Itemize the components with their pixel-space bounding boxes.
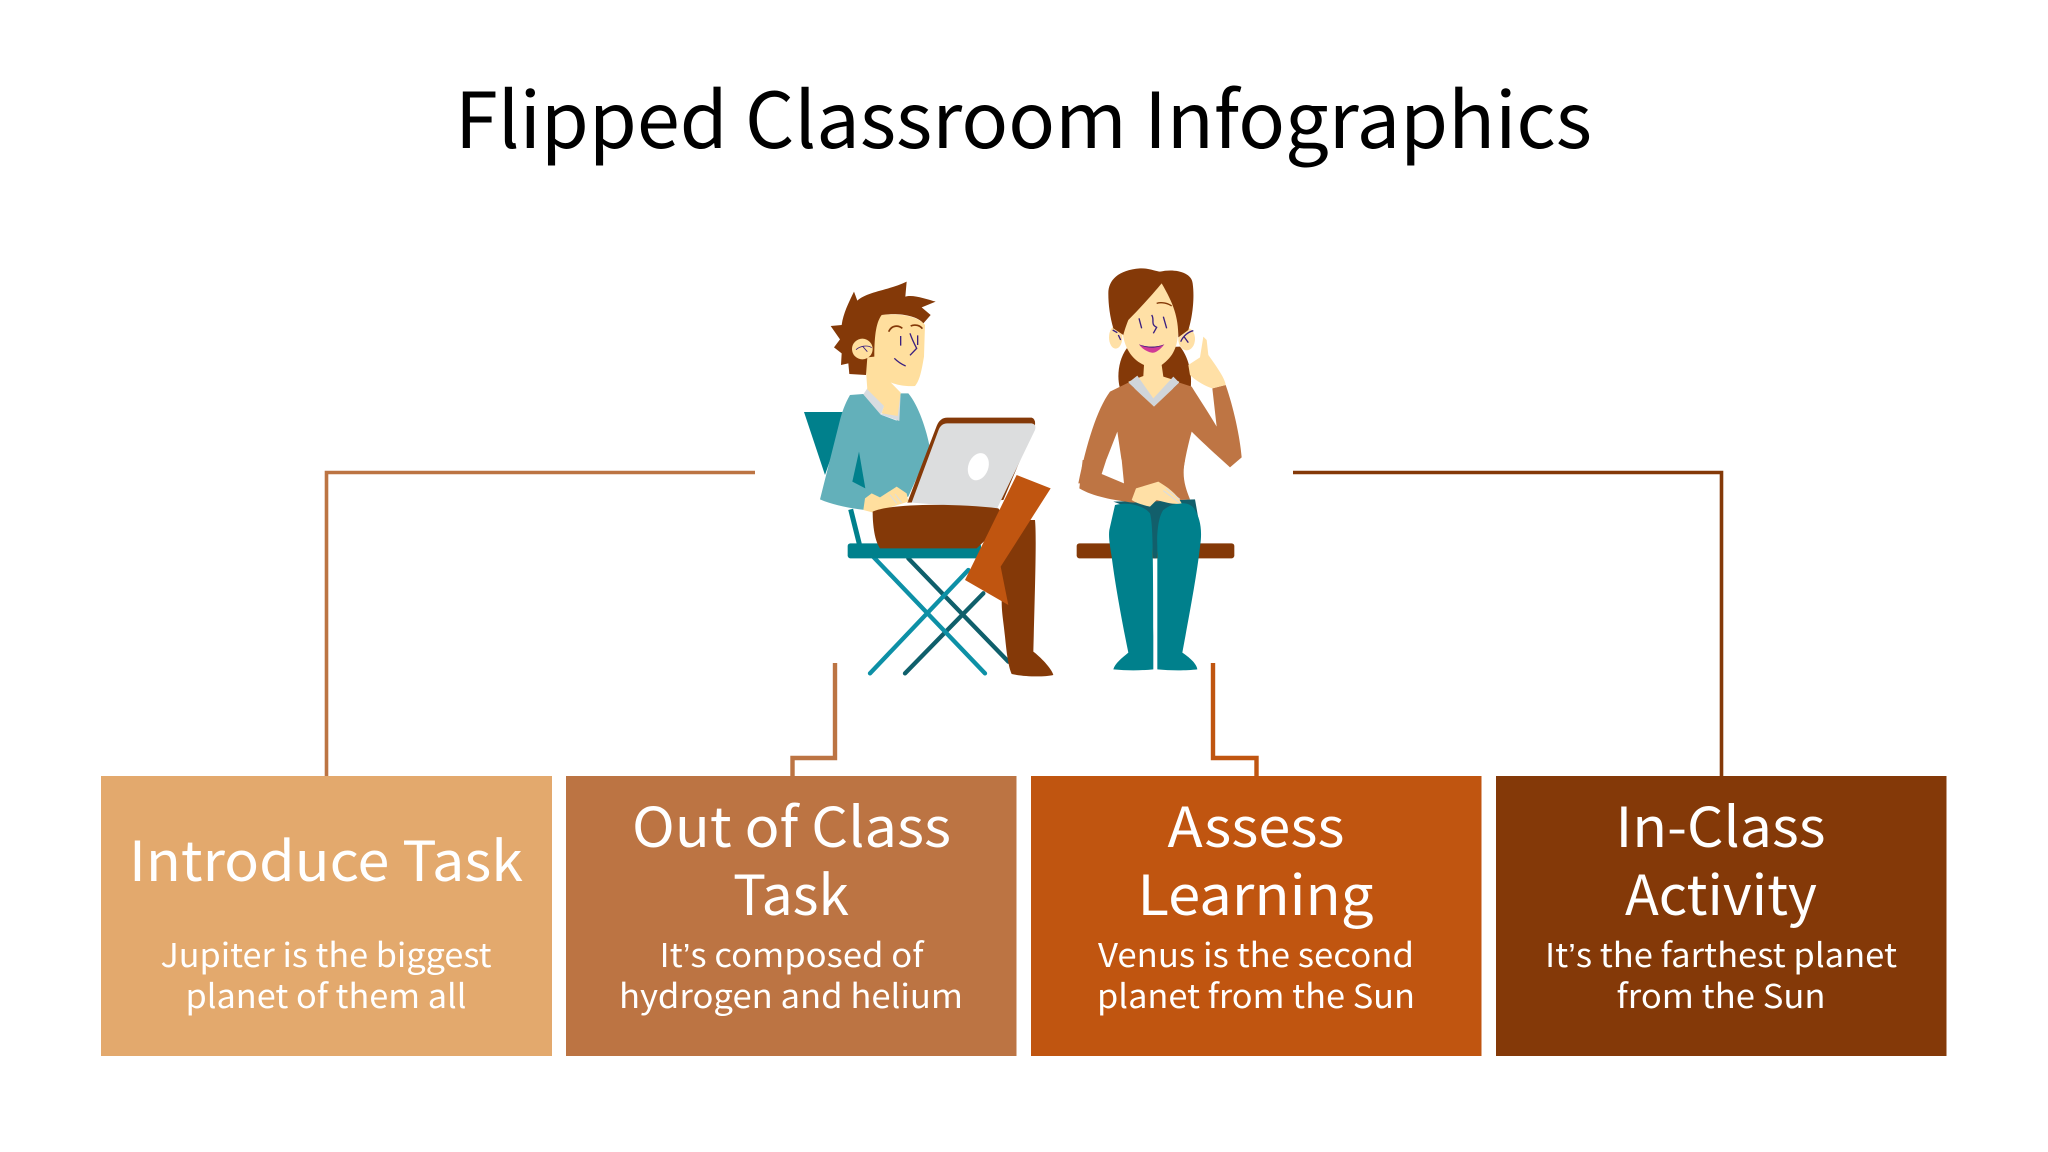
body: in-class activity: It’s the farthest planet — [1545, 929, 1897, 977]
body: assess learning: planet from the Sun — [1097, 970, 1415, 1018]
connector: assess learning — [1213, 663, 1256, 776]
title: Flipped Classroom Infographics — [455, 60, 1592, 171]
connector: introduce task — [326, 472, 755, 776]
heading: assess learning: Learning — [1138, 851, 1374, 931]
body: in-class activity — [1545, 929, 1897, 1018]
body: introduce task — [160, 929, 492, 1018]
woman sitting on bench — [1077, 268, 1242, 670]
heading: out of class task: Out of Class — [632, 783, 951, 863]
connector: in-class activity — [1293, 472, 1722, 776]
woman's hair and head — [1078, 268, 1242, 483]
heading: assess learning — [1138, 783, 1374, 931]
heading: out of class task — [632, 783, 951, 931]
heading: introduce task: Introduce Task — [129, 817, 523, 897]
heading: in-class activity: Activity — [1625, 851, 1817, 931]
body: in-class activity: from the Sun — [1616, 970, 1826, 1018]
panel: assess learning — [1031, 776, 1482, 1056]
heading: assess learning: Assess — [1168, 783, 1344, 863]
illustration: student and teacher — [804, 268, 1242, 676]
chair — [804, 412, 1008, 673]
man's sweater — [820, 393, 930, 510]
man's head — [831, 282, 936, 421]
body: out of class task — [619, 929, 963, 1018]
heading: in-class activity — [1616, 783, 1826, 931]
connector: out of class task — [792, 663, 835, 776]
body: introduce task: Jupiter is the biggest — [160, 929, 492, 977]
body: assess learning — [1097, 929, 1415, 1018]
woman's arm and hand on lap — [1079, 460, 1190, 507]
body: out of class task: It’s composed of — [660, 929, 925, 977]
heading: in-class activity: In-Class — [1616, 783, 1826, 863]
man's laptop and legs — [863, 418, 1053, 676]
body: out of class task: hydrogen and helium — [619, 970, 963, 1018]
bench and legs — [1077, 499, 1234, 670]
heading: out of class task: Task — [733, 851, 849, 931]
body: introduce task: planet of them all — [186, 970, 466, 1018]
panel: introduce task — [101, 776, 552, 1056]
panel: in-class activity — [1496, 776, 1946, 1056]
panel: out of class task — [566, 776, 1016, 1056]
man with laptop on folding chair — [804, 282, 1053, 676]
body: assess learning: Venus is the second — [1098, 929, 1414, 977]
